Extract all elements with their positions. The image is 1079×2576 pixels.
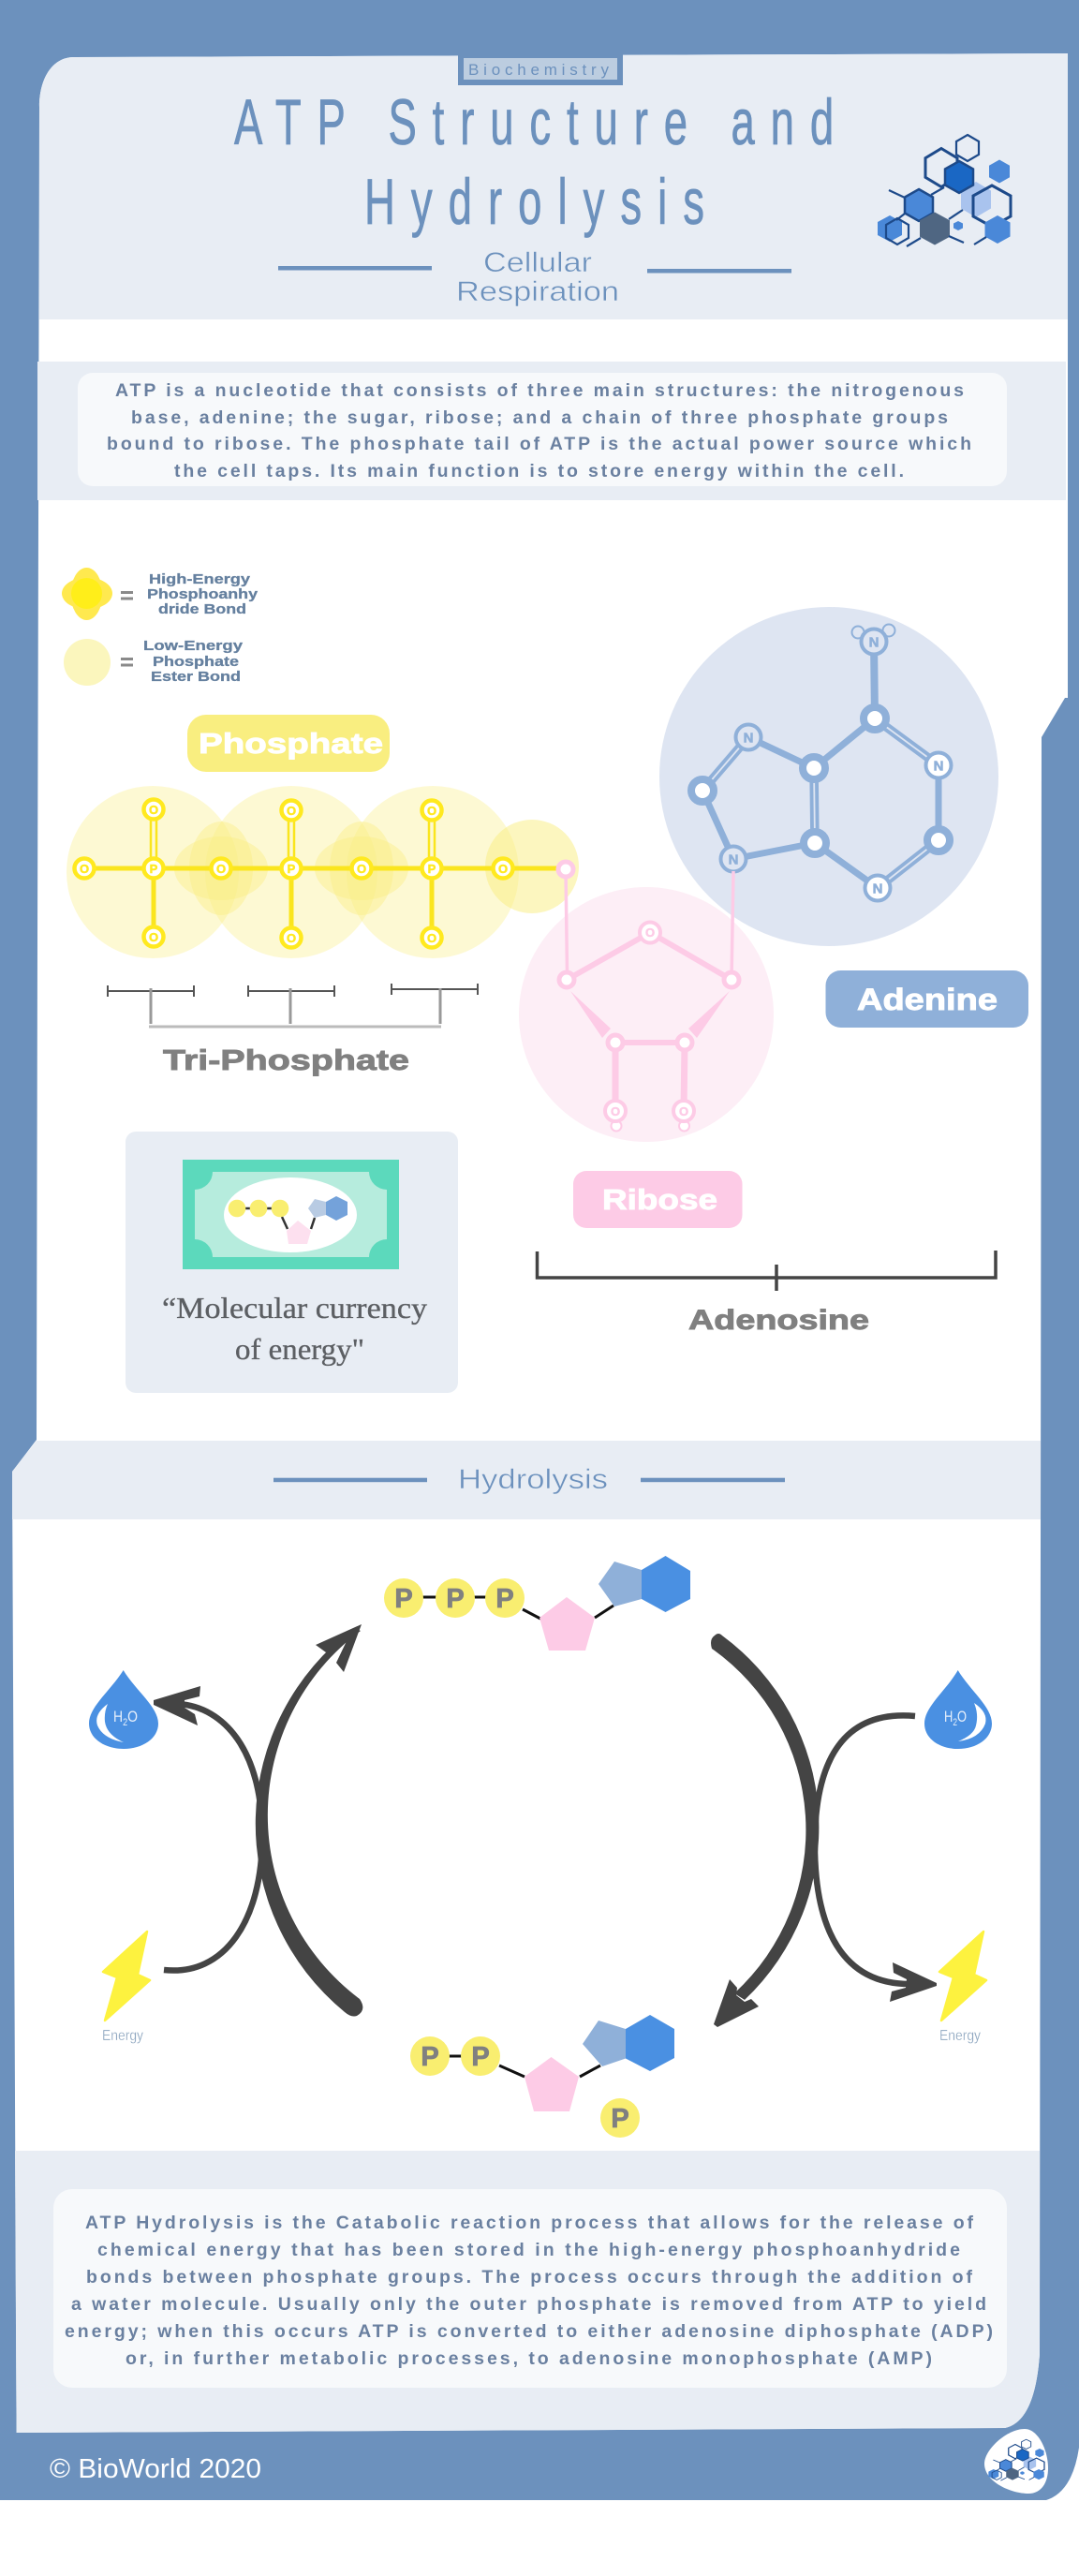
- ribose molecule: [558, 862, 739, 1132]
- legend label: low-energy: Ester Bond: [151, 669, 241, 685]
- phosphate chain diagram: O: [357, 862, 366, 876]
- icon: water drop left: [89, 1670, 158, 1749]
- phosphate chain diagram: O: [287, 804, 296, 818]
- ribose circle: [519, 887, 774, 1142]
- subtitle: Cellular Respiration: [278, 247, 791, 307]
- legend label: low-energy: [143, 638, 244, 685]
- subtitle: Cellular Respiration: Cellular: [483, 247, 592, 278]
- icon: low-energy bond: [64, 639, 111, 686]
- phosphate chain diagram: O: [427, 931, 436, 945]
- icon: lightning left: [103, 1932, 150, 2021]
- label: Energy left: Energy: [102, 2028, 143, 2044]
- subtitle: Cellular Respiration: Respiration: [456, 276, 619, 307]
- label: Tri-Phosphate: Tri-Phosphate: [163, 1044, 409, 1076]
- panel: molecular currency: [126, 1132, 458, 1393]
- legend label: high-energy: dride Bond: [158, 601, 246, 617]
- icon: water drop left: 2: [123, 1717, 127, 1728]
- molecule: ADP plus phosphate: P: [421, 2042, 439, 2072]
- legend label: high-energy: Phosphoanhy: [147, 586, 259, 602]
- hydrolysis paragraph: chemical energy that has been stored in the high-energy phosphoanhydride: [97, 2240, 960, 2260]
- adenine molecule: N: [744, 731, 753, 746]
- adenine molecule: N: [934, 759, 943, 774]
- phosphate chain diagram: P: [428, 862, 436, 876]
- ribose molecule: O: [611, 1104, 620, 1118]
- ribose molecule: O: [645, 925, 655, 940]
- legend label: high-energy: [147, 571, 259, 617]
- bracket: adenosine: [538, 1251, 996, 1291]
- legend: [62, 568, 259, 686]
- label: Adenine: Adenine: [857, 983, 998, 1016]
- panel: header: [39, 53, 1068, 319]
- molecule: ATP: P: [394, 1584, 413, 1614]
- intro paragraph: bound to ribose. The phosphate tail of ATP is the actual power source which: [107, 434, 971, 454]
- phosphate chain diagram: P: [150, 862, 158, 876]
- icon: banknote with ATP: [183, 1160, 399, 1269]
- quote: [162, 1291, 427, 1366]
- hydrolysis paragraph: [65, 2213, 993, 2369]
- intro paragraph: ATP is a nucleotide that consists of three main structures: the nitrogenous: [115, 380, 964, 401]
- phosphate chain diagram: O: [427, 804, 436, 818]
- panel: hydrolysis text: [15, 2151, 1040, 2433]
- phosphate chain diagram: O: [80, 862, 89, 876]
- hydrolysis paragraph: bonds between phosphate groups. The process occurs through the addition of: [86, 2267, 972, 2287]
- title: ATP Structure and: [234, 87, 834, 158]
- icon: high-energy bond: [62, 568, 112, 620]
- arrow: thin right curve, water to energy: [815, 1715, 937, 2002]
- panel: intro text: [37, 362, 1066, 500]
- legend label: low-energy: Low-Energy: [143, 638, 244, 654]
- label: Ribose: [573, 1171, 742, 1228]
- heading band: Hydrolysis: Hydrolysis: [458, 1464, 608, 1495]
- molecule: ATP: P: [446, 1584, 465, 1614]
- phosphate chain diagram: O: [149, 930, 158, 944]
- phosphate chain diagram: [67, 786, 579, 958]
- phosphate chain diagram: P: [288, 862, 296, 876]
- intro paragraph: the cell taps. Its main function is to store energy within the cell.: [174, 461, 904, 481]
- title: [234, 87, 834, 238]
- adenine circle: [659, 607, 998, 946]
- molecule: ADP plus phosphate: P: [611, 2104, 629, 2134]
- icon: water drop right: 2: [953, 1717, 957, 1728]
- phosphate chain diagram: O: [216, 862, 226, 876]
- tag: Biochemistry: [461, 55, 620, 82]
- quote: “Molecular currency: [162, 1291, 427, 1325]
- label: Adenine: [826, 970, 1028, 1028]
- hydrolysis paragraph: or, in further metabolic processes, to adenosine monophosphate (AMP): [126, 2348, 932, 2369]
- molecule: ADP plus phosphate: [410, 2015, 674, 2138]
- molecule: ATP: P: [495, 1584, 514, 1614]
- arrow: thin left curve, energy to water: [154, 1686, 262, 1971]
- icon: water drop left: O: [127, 1708, 138, 1725]
- adenine molecule: N: [869, 635, 879, 650]
- title: Hydrolysis: [364, 167, 704, 238]
- adenine molecule: N: [873, 881, 882, 897]
- intro paragraph: base, adenine; the sugar, ribose; and a chain of three phosphate groups: [131, 407, 948, 428]
- icon: water drop left: H: [113, 1708, 125, 1725]
- adenine molecule: N: [729, 852, 738, 867]
- icon: water drop right: H: [944, 1708, 955, 1725]
- legend label: low-energy: Phosphate: [153, 654, 239, 670]
- hydrolysis paragraph: a water molecule. Usually only the outer phosphate is removed from ATP to yield: [71, 2294, 986, 2315]
- quote: of energy": [235, 1332, 364, 1366]
- adenine molecule: [691, 624, 952, 901]
- footer credit: © BioWorld 2020: [50, 2454, 261, 2484]
- molecule: ATP: [384, 1556, 690, 1651]
- icon: hexagon molecule logo: [878, 135, 1011, 246]
- ribose molecule: O: [679, 1104, 688, 1118]
- label: Phosphate: Phosphate: [199, 727, 383, 760]
- phosphate chain diagram: O: [149, 803, 158, 817]
- arrow: large right arc, ATP to ADP: [711, 1634, 819, 2027]
- icon: lightning right: [939, 1932, 986, 2021]
- label: Ribose: Ribose: [602, 1183, 717, 1216]
- phosphate chain diagram: O: [498, 862, 508, 876]
- tag: Biochemistry: Biochemistry: [468, 61, 609, 79]
- arrow: large left arc, ADP to ATP: [256, 1624, 362, 2016]
- equals sign: [121, 592, 133, 665]
- label: Energy right: Energy: [939, 2028, 981, 2044]
- legend label: high-energy: High-Energy: [149, 571, 251, 587]
- heading band: Hydrolysis: [12, 1441, 1041, 1519]
- hydrolysis paragraph: energy; when this occurs ATP is converted to either adenosine diphosphate (ADP): [65, 2321, 993, 2342]
- phosphate chain diagram: O: [287, 931, 296, 945]
- molecule: ADP plus phosphate: P: [471, 2042, 490, 2072]
- intro paragraph: [107, 380, 971, 481]
- footer logo badge: [984, 2429, 1048, 2494]
- hydrolysis paragraph: ATP Hydrolysis is the Catabolic reaction process that allows for the release of: [85, 2213, 974, 2233]
- label: Adenosine: Adenosine: [688, 1305, 869, 1336]
- icon: water drop right: [924, 1670, 992, 1749]
- label: Phosphate: [187, 715, 390, 772]
- bracket: tri-phosphate: [108, 984, 478, 1027]
- icon: water drop right: O: [957, 1708, 967, 1725]
